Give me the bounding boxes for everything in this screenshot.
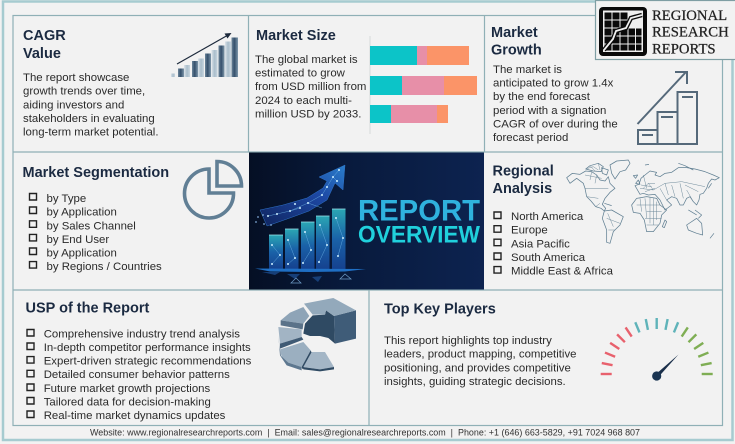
panel: Top Key Players [384,301,713,388]
text: CAGR description: long-term market potential. [23,127,158,139]
list: USP items: Detailed consumer behavior patterns [44,369,230,381]
list: regions: Middle East & Africa [511,266,614,278]
text: Market Growth description: anticipated to grow 1.4x [493,78,614,90]
list: USP items [27,328,252,422]
list: USP items: In-depth competitor performance insights [44,342,251,354]
heading: Market Growth [491,25,542,58]
text: Market Size description: 2024 to each multi- [255,95,352,107]
list: regions: South America [511,252,586,264]
text: Market Growth description: period with a signation [493,105,606,117]
text: CAGR description: stakeholders in evaluating [23,113,155,125]
text: Market Size description: million USD by 2033. [255,108,361,120]
panel: Regional Analysis [492,160,719,278]
text: Top Key Players description: insights, guiding strategic decisions. [384,376,566,388]
heading: Market Size: Market Size [256,28,336,44]
text: Market Growth description: by the end forecast [493,91,591,103]
chart: stacked horizontal bars [370,36,477,134]
text: CAGR description [23,72,158,139]
heading: Market Segmentation: Market Segmentation [22,165,169,181]
heading: Top Key Players: Top Key Players [384,301,496,317]
heading: Regional Analysis: Regional [492,164,554,180]
text: CAGR description: growth trends over time, [23,86,145,98]
list: segmentation items: by End User [46,234,109,246]
heading: Market Growth: Market [491,25,538,41]
text: Market Growth description [493,64,618,144]
list: USP items: Real-time market dynamics updates [44,410,226,422]
text: Market Growth description: The market is [493,64,562,76]
icon: 3D segmented ring [278,298,356,371]
text: Market Growth description: CAGR of over during the [493,118,618,130]
text: CAGR description: aiding investors and [23,99,124,111]
text: Market Size description [255,54,366,120]
panel: Market Growth [491,25,697,144]
list: regions [494,211,614,278]
heading: Regional Analysis: Analysis [492,181,552,197]
list: segmentation items: by Sales Channel [46,220,136,232]
text: Market Size description: from USD million from [255,81,366,93]
logo wordmark [652,8,729,58]
list: USP items: Comprehensive industry trend analysis [44,328,240,340]
illustration: glowing bars and arrow [255,165,366,283]
arrow [255,165,345,226]
icon: pie chart [185,162,242,218]
title: REPORT OVERVIEW: REPORT [358,194,480,228]
logo wordmark: REGIONAL [652,8,727,24]
icon: growth steps with arrow [638,72,697,144]
text: Top Key Players description: This report highlights top industry [384,335,552,347]
list: regions: Europe [511,225,548,237]
logo: Regional Research Reports [596,0,735,60]
list: regions: North America [511,211,584,223]
title: REPORT OVERVIEW [358,194,480,248]
heading: CAGR Value: Value [23,46,61,62]
list: USP items: Tailored data for decision-making [44,396,211,408]
list: segmentation items: by Application [46,248,117,260]
heading: CAGR Value [23,28,66,62]
panel: Market Segmentation [22,162,242,273]
title: REPORT OVERVIEW: OVERVIEW [358,222,480,248]
list: segmentation items [30,193,162,273]
footer: contact details: Website: www.regionalresearchreports.com | Email: sales@regionalresearchreports.com | Phone: +1 (646) 663-5829, +91 7024 968 807 [90,428,640,438]
bars [269,209,346,269]
text: Market Size description: estimated to grow [255,68,346,80]
ground strip [255,268,366,283]
list: USP items: Future market growth projections [44,383,211,395]
panel: CAGR Value [23,28,238,139]
heading: Market Growth: Growth [491,42,542,58]
panel: Report Overview image [249,152,484,290]
icon: rising bars with arrow [171,33,238,77]
text: Top Key Players description [384,335,576,388]
icon: logo chart mark [599,7,647,56]
text: CAGR description: The report showcase [23,72,129,84]
text: Top Key Players description: leaders, product mapping, competitive [384,349,576,361]
heading: Regional Analysis [492,164,554,197]
logo wordmark: RESEARCH [652,24,729,40]
panel: Market Size [255,28,477,134]
heading: CAGR Value: CAGR [23,28,66,44]
text: Market Growth description: forecast period [493,132,568,144]
list: regions: Asia Pacific [511,238,570,250]
list: USP items: Expert-driven strategic recommendations [44,356,252,368]
text: Market Size description: The global market is [255,54,358,66]
list: segmentation items: by Regions / Countries [46,261,162,273]
world map outline [567,160,719,243]
list: segmentation items: by Type [46,193,86,205]
list: segmentation items: by Application [46,207,117,219]
text: Top Key Players description: positioning, and provides competitive [384,362,571,374]
heading: USP of the Report: USP of the Report [26,301,149,317]
logo wordmark: REPORTS [652,42,716,58]
chart: speedometer gauge [601,318,713,381]
panel: USP of the Report [26,298,356,422]
